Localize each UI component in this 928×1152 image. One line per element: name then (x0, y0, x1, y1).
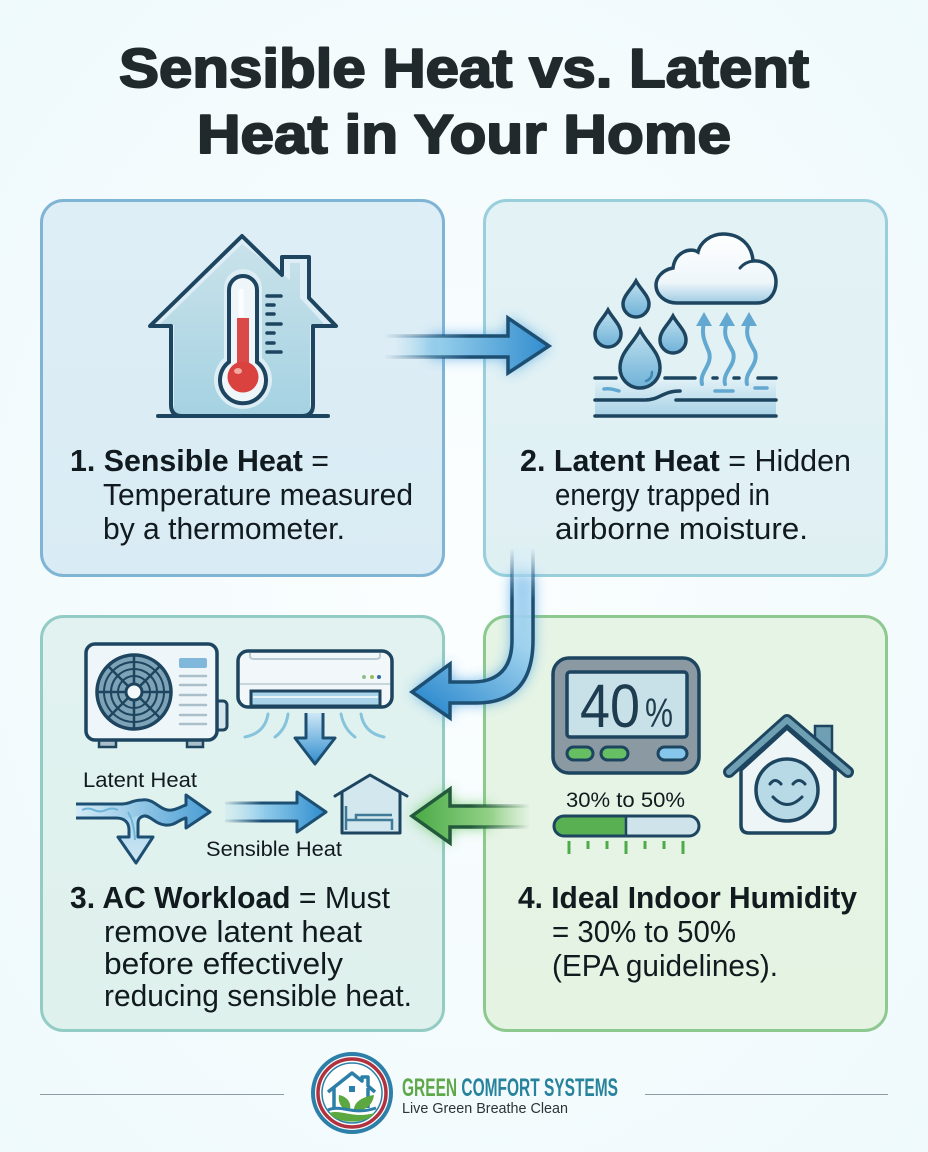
humidity reading: 40 (580, 672, 640, 740)
panel 4: ideal humidity (484, 616, 886, 1030)
text: ideal humidity definition: = 30% to 50% (552, 914, 736, 949)
text: ideal humidity definition (518, 880, 858, 983)
text: sensible heat definition (70, 443, 413, 546)
text: latent heat definition: energy trapped in (555, 477, 770, 512)
label: 30% to 50%: 30% to 50% (566, 789, 685, 812)
icon: happy house (729, 720, 848, 833)
title (119, 37, 809, 165)
humidity reading: % (645, 690, 673, 736)
text: latent heat definition (520, 443, 851, 546)
panel 1 background (42, 200, 444, 576)
panel 4 background (484, 616, 886, 1030)
text: AC workload definition: remove latent heat (104, 914, 362, 949)
icon: small house with bed (335, 775, 407, 833)
panel 1: sensible heat (42, 200, 444, 576)
arrow: sensible heat (225, 792, 326, 832)
text: sensible heat definition: by a thermometer. (103, 511, 345, 546)
panel 2 background (484, 200, 886, 576)
text: AC workload definition: 3. AC Workload = Must (70, 880, 390, 915)
tagline: Live Green Breathe Clean (402, 1100, 568, 1117)
logo: green comfort systems (313, 1054, 391, 1132)
footer (40, 1054, 888, 1132)
text: AC workload definition: reducing sensible heat. (104, 978, 412, 1013)
text: sensible heat definition: Temperature measured (103, 477, 413, 512)
icon: water, drops and cloud (595, 234, 776, 416)
arrow: latent heat split (76, 795, 210, 863)
title: Sensible Heat vs. Latent (119, 37, 809, 99)
arrow: latent to AC workload (412, 548, 533, 718)
humidity range bar (554, 816, 699, 854)
label: sensible heat: Sensible Heat (206, 838, 342, 861)
panel 2: latent heat (484, 200, 886, 576)
text: AC workload definition (70, 880, 412, 1013)
icon: house with thermometer (150, 236, 336, 416)
company name: GREEN COMFORT SYSTEMS (402, 1074, 618, 1102)
text: ideal humidity definition: 4. Ideal Indoor Humidity (518, 880, 858, 915)
text: sensible heat definition: 1. Sensible Heat = (70, 443, 329, 478)
panel 3: AC workload (42, 616, 444, 1030)
title: Heat in Your Home (197, 103, 731, 165)
arrow: sensible to latent (385, 318, 549, 373)
text: latent heat definition: 2. Latent Heat = Hidden (520, 443, 851, 478)
text: AC workload definition: before effectively (104, 946, 344, 981)
text: latent heat definition: airborne moisture. (555, 511, 808, 546)
icon: indoor AC unit (238, 651, 392, 737)
icon: outdoor AC unit (86, 644, 227, 747)
icon: humidity meter (553, 658, 699, 773)
arrow: humidity to AC workload (412, 789, 530, 843)
label: latent heat: Latent Heat (83, 769, 197, 792)
panel 3 background (42, 616, 444, 1030)
text: ideal humidity definition: (EPA guidelines). (552, 948, 778, 983)
arrow: cold air down (295, 713, 335, 764)
